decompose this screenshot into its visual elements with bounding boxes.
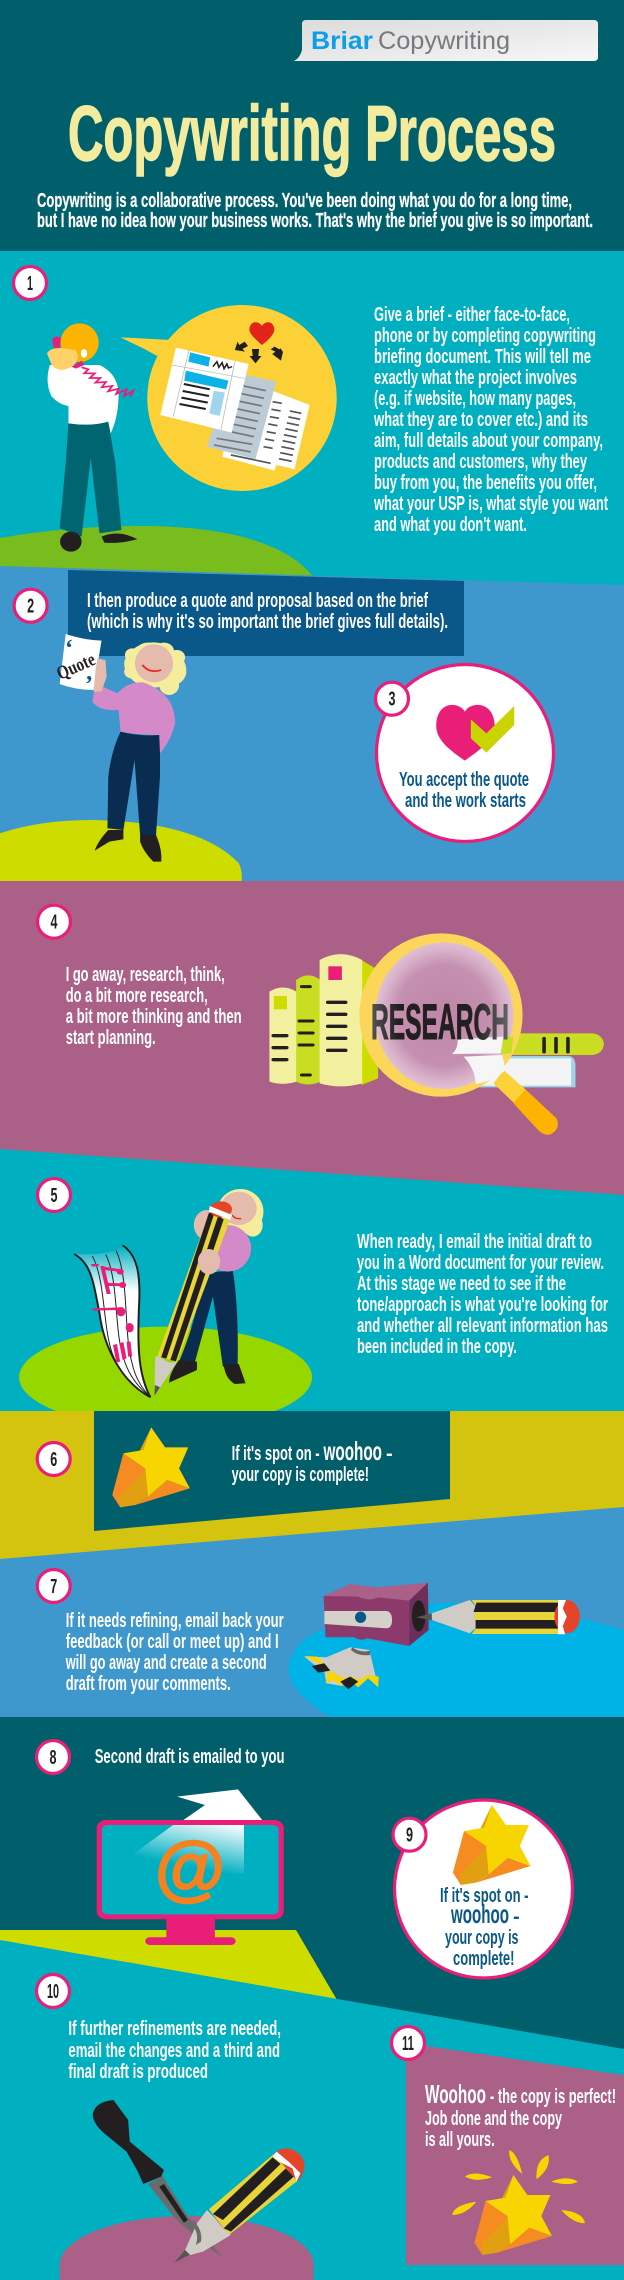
panel: step 4 research (0, 881, 624, 1201)
sharpener (324, 1583, 429, 1646)
step 7 text: If it needs refining, email back your (66, 1610, 284, 1632)
step 6 text: - (386, 1443, 393, 1465)
step number 6 (37, 1442, 70, 1476)
green mound (19, 1327, 312, 1428)
giant pencil (154, 1201, 232, 1396)
magnifying glass (359, 933, 558, 1135)
step 9 text: If it's spot on - (440, 1885, 528, 1907)
step number 10 (36, 1974, 70, 2008)
step 11 text: is all yours. (425, 2129, 495, 2151)
lime wedge (0, 1930, 337, 2000)
step 4 text: a bit more thinking and then (66, 1006, 242, 1028)
step 1 text (373, 304, 608, 536)
quote label: ‘ (65, 636, 73, 662)
step number 3 (376, 682, 408, 715)
hand (94, 658, 107, 692)
step 9 text: woohoo (450, 1899, 509, 1929)
logo (294, 20, 598, 61)
documents (160, 348, 310, 471)
step 10 text (68, 2018, 281, 2083)
panel: step 7 refining (0, 1500, 624, 1718)
illustration: woman holding quote (0, 634, 242, 881)
step number 4: 4 (50, 912, 58, 934)
panel: steps 8 and 9 second draft (0, 1717, 624, 2057)
icon: star with splashes (452, 2150, 585, 2255)
illustration: screwdriver and broken pencil (60, 2100, 314, 2280)
step 3 text (399, 769, 529, 812)
purple mound (60, 2216, 314, 2280)
flying envelope (177, 1789, 263, 1822)
panel: header (0, 0, 624, 252)
message box (94, 1411, 450, 1531)
step number 11: 11 (402, 2033, 414, 2055)
quote banner (68, 570, 464, 656)
step 4 text (66, 964, 242, 1049)
illustration: man on phone with speech bubble (47, 305, 337, 552)
step number 7 (37, 1570, 70, 1602)
panel: step 5 draft (0, 1149, 624, 1428)
step 7 text: will go away and create a second (65, 1652, 267, 1674)
music paper (74, 1245, 150, 1397)
step 5 text (357, 1231, 608, 1358)
step 3 text: You accept the quote (399, 769, 529, 791)
quote banner: I then produce a quote and proposal based on the brief (87, 590, 428, 612)
intro text (37, 190, 593, 232)
step number 8 (36, 1740, 70, 1774)
man (47, 323, 137, 552)
illustration: woman with giant pencil (19, 1189, 312, 1428)
quote label: Quote (53, 649, 99, 685)
shavings (304, 1647, 379, 1689)
quote label (53, 636, 99, 698)
stacked books (450, 1033, 604, 1087)
step 9 text: - (513, 1906, 520, 1928)
step 7 text: draft from your comments. (66, 1673, 231, 1695)
step 5 text: been included in the copy. (357, 1336, 517, 1358)
step 9 text: your copy is (445, 1927, 518, 1949)
icon: star (112, 1427, 190, 1507)
step 4 text: I go away, research, think, (66, 964, 225, 986)
step 10 text: If further refinements are needed, (68, 2018, 281, 2040)
step number 1: 1 (27, 273, 33, 295)
step 6 text: woohoo (323, 1436, 382, 1466)
step number 9: 9 (406, 1824, 413, 1846)
step 11 text (425, 2079, 616, 2151)
step 9 text (440, 1885, 528, 1970)
icon: star (453, 1805, 531, 1885)
blue blob (288, 1603, 624, 1717)
panel: step 6 spot on (0, 1411, 624, 1559)
illustration: monitor with email (97, 1789, 284, 1945)
illustration: books and magnifying glass (269, 933, 604, 1135)
step number 2: 2 (27, 596, 34, 618)
step 6 text: If it's spot on - (232, 1443, 320, 1465)
hand (198, 1249, 220, 1274)
step 7 text (65, 1610, 284, 1695)
quote banner: (which is why it's so important the brief gives full details). (87, 611, 448, 633)
step number 6: 6 (50, 1449, 57, 1471)
speech bubble (120, 305, 337, 491)
step number 8: 8 (50, 1747, 56, 1769)
step 6 text (232, 1436, 393, 1486)
icon: heart and arrows (235, 322, 283, 363)
icon: heart and tick (436, 705, 514, 761)
screwdriver (93, 2100, 222, 2257)
step 8 text: Second draft is emailed to you (95, 1746, 284, 1768)
panel: steps 10 and 11 final (0, 1940, 624, 2280)
step 9 circle (394, 1800, 572, 1978)
quote label: ’ (85, 672, 93, 698)
woman (92, 642, 186, 862)
step number 10: 10 (47, 1981, 59, 2003)
panel: steps 2 and 3 quote (0, 566, 624, 882)
logo: Copywriting (378, 27, 510, 55)
broken pencil (174, 2148, 304, 2263)
step 9 text: complete! (453, 1948, 514, 1970)
pencil (416, 1600, 580, 1634)
upright books (269, 954, 378, 1086)
step number 4 (38, 905, 70, 938)
step 6 text: your copy is complete! (232, 1464, 369, 1486)
illustration: pencil sharpener (288, 1583, 624, 1717)
step number 2 (14, 589, 47, 622)
quote paper (60, 634, 101, 690)
step number 5 (38, 1178, 70, 1212)
step number 11 (392, 2026, 424, 2060)
step 10 text: final draft is produced (68, 2061, 208, 2083)
green mound (0, 526, 314, 578)
icon: at sign: @ (155, 1828, 225, 1908)
step 11 box (406, 2043, 624, 2265)
logo: Briar (311, 27, 373, 55)
step 3 text: and the work starts (405, 790, 526, 812)
lime mound (0, 820, 242, 881)
step number 7: 7 (50, 1576, 57, 1598)
step 3 circle (376, 664, 554, 842)
step number 5: 5 (50, 1185, 58, 1207)
step 7 text: feedback (or call or meet up) and I (66, 1631, 279, 1653)
woman (169, 1189, 263, 1384)
step 4 text: do a bit more research, (66, 985, 208, 1007)
step number 1 (14, 266, 46, 300)
step 4 text: start planning. (66, 1027, 156, 1049)
step number 9 (393, 1818, 426, 1851)
step 11 text: Woohoo (425, 2079, 486, 2109)
step 1 text: and what you don't want. (374, 514, 527, 536)
panel: step 1 brief (0, 251, 624, 591)
monitor (97, 1820, 284, 1945)
step number 3: 3 (388, 688, 396, 710)
step 10 text: email the changes and a third and (68, 2040, 280, 2062)
